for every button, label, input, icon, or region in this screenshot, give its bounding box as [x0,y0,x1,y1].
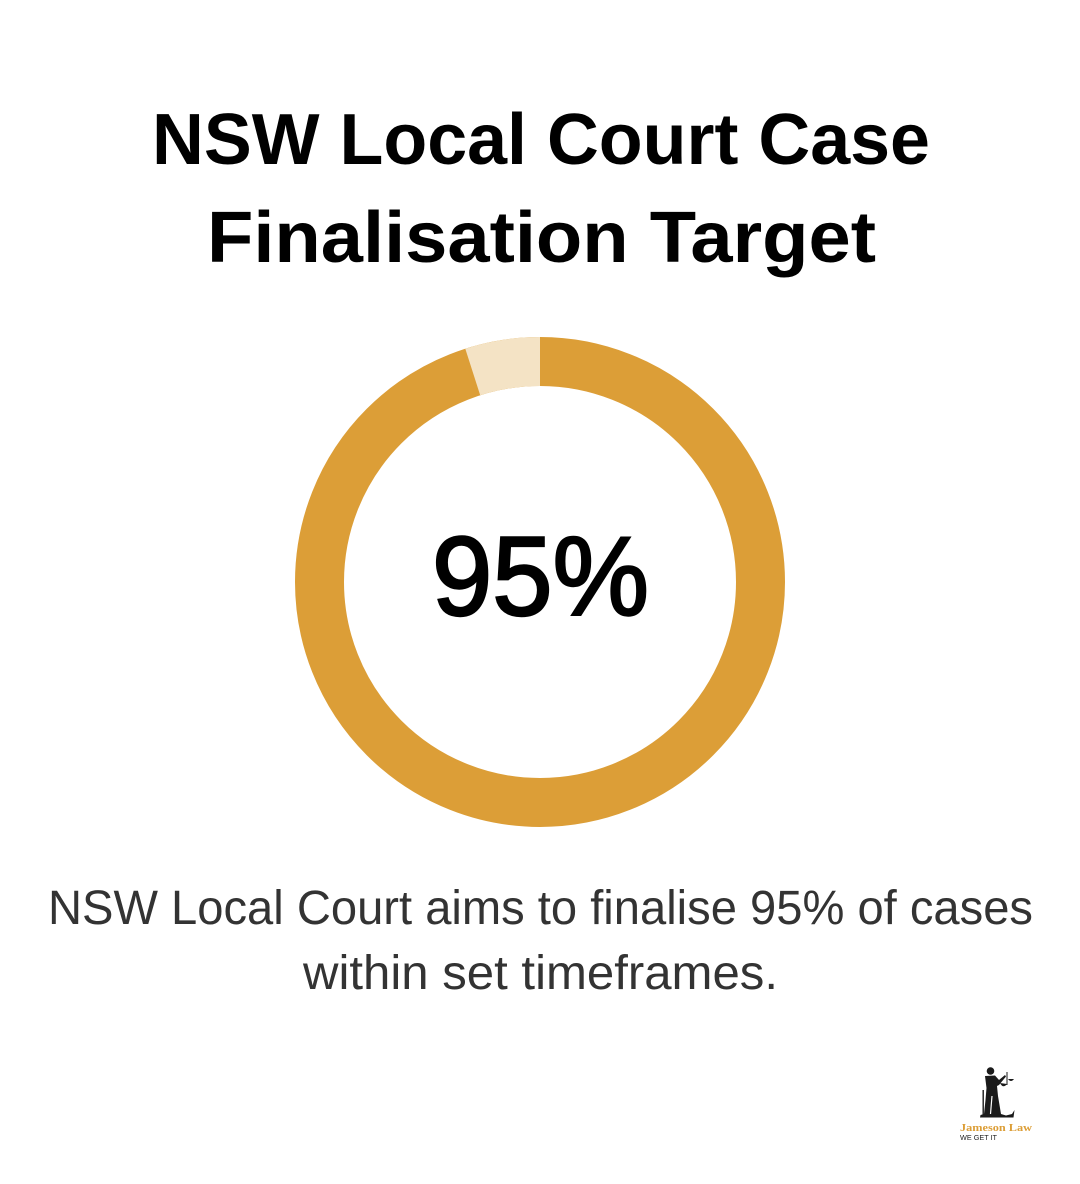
title [152,100,930,278]
description text [48,882,1033,1000]
icon: lady justice [980,1067,1014,1118]
center value: 95% [432,514,649,639]
title: NSW Local Court Case [152,100,930,180]
logo name: Jameson Law [960,1122,1032,1134]
donut chart: 95% [320,337,760,802]
icon detail: white stripe between legs [990,1096,992,1114]
title: Finalisation Target [207,198,876,278]
description text: NSW Local Court aims to finalise 95% of cases [48,882,1033,935]
description text: within set timeframes. [302,947,778,1000]
logo tagline: WE GET IT [960,1135,998,1142]
logo: Jameson Law [960,1067,1032,1142]
